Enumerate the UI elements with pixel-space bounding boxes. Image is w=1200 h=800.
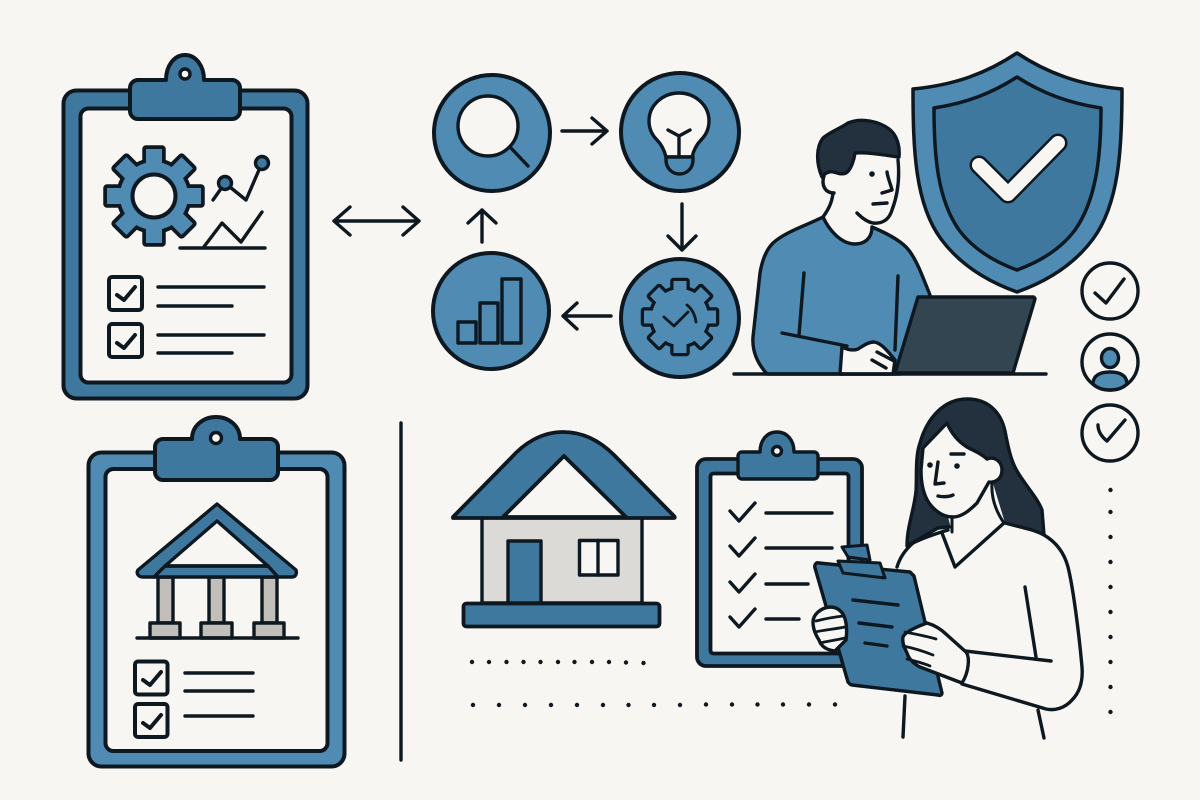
clipboard: bank and checklist	[88, 417, 344, 766]
double-headed arrow	[334, 207, 419, 235]
facial features	[927, 454, 964, 497]
icon: gear	[107, 149, 201, 243]
icon: check circle	[1082, 405, 1138, 461]
arm lines	[782, 273, 898, 350]
dotted line below house, short	[470, 660, 646, 665]
sweater	[753, 217, 930, 374]
icon: lower trend line	[180, 212, 265, 248]
held clipboard	[815, 545, 942, 695]
icon: check circle	[1082, 263, 1138, 319]
checklist	[109, 277, 264, 357]
icon: bank building	[137, 504, 298, 638]
right hand over the clipboard	[903, 623, 968, 683]
clipboard: gear, chart and checklist	[64, 55, 308, 398]
text lines	[766, 513, 832, 619]
hand	[840, 342, 895, 374]
icon: gear with check circle	[621, 259, 739, 377]
shirt fill	[897, 480, 1082, 709]
status icons	[1082, 263, 1138, 461]
arrow: left	[563, 303, 611, 329]
checklist	[135, 662, 253, 737]
dotted line below house, long	[471, 702, 837, 707]
shirt outline	[897, 523, 1082, 710]
arrow: right	[562, 118, 607, 144]
sleeve lines	[965, 587, 1051, 661]
icon: light bulb circle	[621, 73, 739, 191]
icon: user circle	[1082, 334, 1138, 390]
legs	[903, 696, 1044, 738]
icon: house	[453, 432, 675, 626]
clipboard: four-item checklist	[697, 432, 862, 666]
icon: bar chart circle	[433, 253, 549, 369]
person holding clipboard	[813, 399, 1082, 738]
facial features	[869, 171, 892, 204]
person at laptop	[734, 120, 1046, 374]
left hand over the clipboard	[813, 607, 847, 651]
arrow: up	[468, 210, 496, 242]
vertical divider	[399, 423, 403, 760]
collar	[942, 523, 1004, 567]
dotted vertical line	[1108, 488, 1113, 714]
desk line	[734, 372, 1046, 376]
icon: shield with check	[913, 53, 1122, 292]
check marks	[730, 503, 755, 627]
face and neck	[823, 140, 900, 244]
icon: magnifying glass circle	[434, 75, 550, 191]
laptop	[895, 297, 1035, 373]
arrow: down	[668, 204, 696, 250]
hair	[907, 399, 1044, 546]
face	[921, 423, 1002, 517]
hair	[818, 120, 899, 177]
ear	[823, 176, 834, 193]
process cycle	[433, 73, 739, 377]
icon: upper trend line	[213, 156, 268, 200]
